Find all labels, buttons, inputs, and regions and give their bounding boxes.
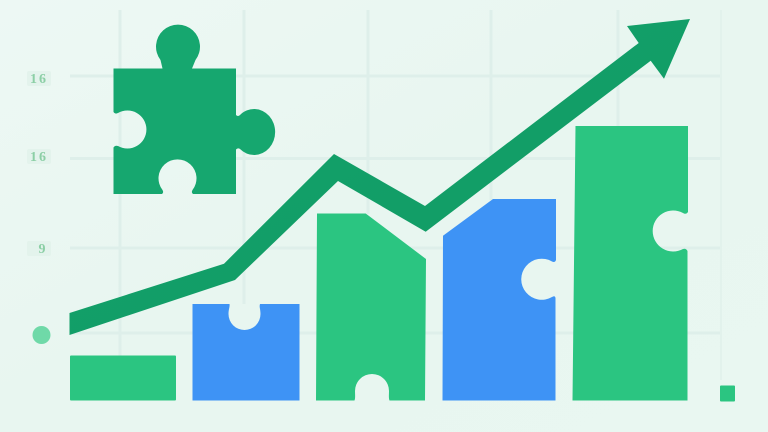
marker dot: [32, 326, 50, 344]
small square marker: [720, 386, 735, 402]
bar 1 green: [70, 356, 176, 400]
axis label: 9: 9: [38, 242, 46, 257]
icon: puzzle piece: [114, 25, 275, 194]
axis label: 16 top: 16: [30, 72, 48, 87]
trend arrow: [70, 19, 690, 335]
axis label: 9: [27, 241, 51, 257]
bar 2 blue with notch: [192, 304, 300, 400]
bar 3 green with notch: [316, 214, 426, 400]
axis label: 16 middle: 16: [30, 150, 48, 165]
bar 4 blue with notch: [442, 199, 556, 400]
bar 5 green with notch: [572, 126, 688, 400]
